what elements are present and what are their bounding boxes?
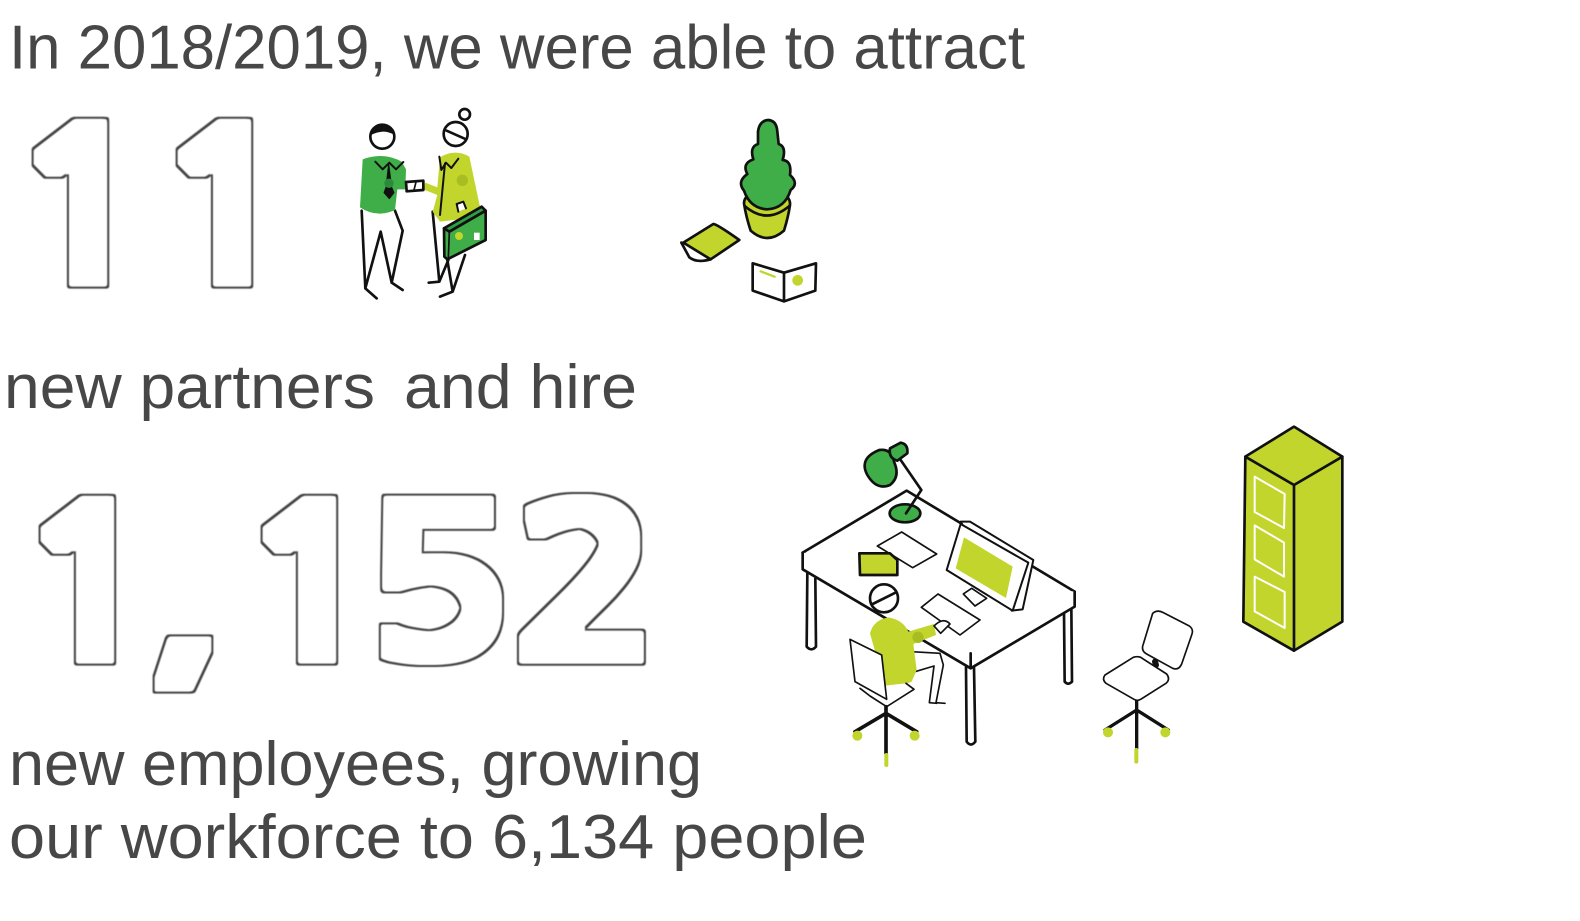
text: new employees: new employees, growing bbox=[9, 730, 702, 799]
icon: desk lamp bbox=[865, 443, 921, 522]
icon: papers and folder bbox=[859, 532, 937, 575]
icon: man in green bbox=[360, 125, 406, 298]
icon: man in lime with briefcase bbox=[406, 109, 486, 297]
big number: 11 partners: 11 bbox=[8, 108, 301, 311]
icon: seated worker bbox=[870, 584, 950, 703]
icon: occupied chair bbox=[850, 639, 920, 765]
icon: desk bbox=[803, 491, 1075, 744]
heading: intro line: In 2018/2019, we were able to attract bbox=[9, 14, 1025, 82]
icon: open book bbox=[753, 263, 816, 301]
text: workforce total: our workforce to 6,134 people bbox=[9, 803, 867, 872]
icon: monitor and keyboard bbox=[921, 522, 1033, 635]
icon: folder bbox=[681, 224, 739, 261]
icon: potted plant bbox=[741, 120, 795, 238]
illustration: partners handshake bbox=[360, 109, 816, 301]
big number: 1,152 employees: 1,152 bbox=[15, 485, 660, 688]
text: new partners: new partners bbox=[4, 353, 375, 422]
text: and hire: and hire bbox=[404, 353, 637, 422]
icon: empty chair bbox=[1103, 611, 1192, 762]
icon: filing cabinet bbox=[1243, 427, 1342, 651]
illustration: office desk bbox=[803, 443, 1192, 765]
